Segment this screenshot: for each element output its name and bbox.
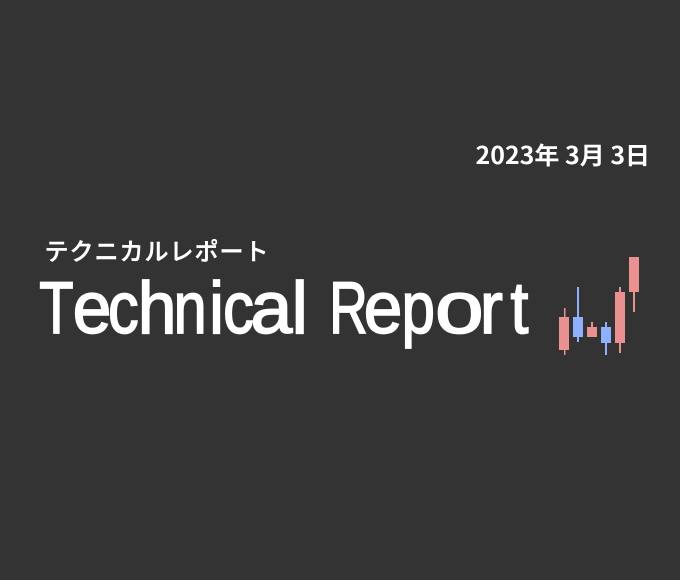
candle 5 xyxy=(615,287,625,353)
title: T xyxy=(39,268,74,349)
subtitle: テクニカルレポート xyxy=(44,232,268,267)
title: n xyxy=(174,268,207,349)
title: e xyxy=(364,268,402,349)
candle 2 xyxy=(573,287,583,342)
date: 2023年 3月 3日 xyxy=(476,136,650,171)
title: t xyxy=(510,268,528,349)
title: c xyxy=(108,268,139,349)
candle 3 xyxy=(587,322,597,337)
title: e xyxy=(73,268,111,349)
title: h xyxy=(138,268,176,349)
title: c xyxy=(223,268,254,349)
title: o xyxy=(435,268,484,349)
candle 4 xyxy=(601,322,611,355)
title: l xyxy=(292,268,308,349)
title: r xyxy=(480,268,503,349)
candle 1 xyxy=(559,308,569,355)
title: p xyxy=(402,268,435,349)
candle 6 xyxy=(629,257,639,312)
title: i xyxy=(209,268,224,349)
title: R xyxy=(329,268,368,349)
title xyxy=(39,268,528,349)
candlestick chart icon xyxy=(559,257,639,355)
title: a xyxy=(250,268,293,349)
